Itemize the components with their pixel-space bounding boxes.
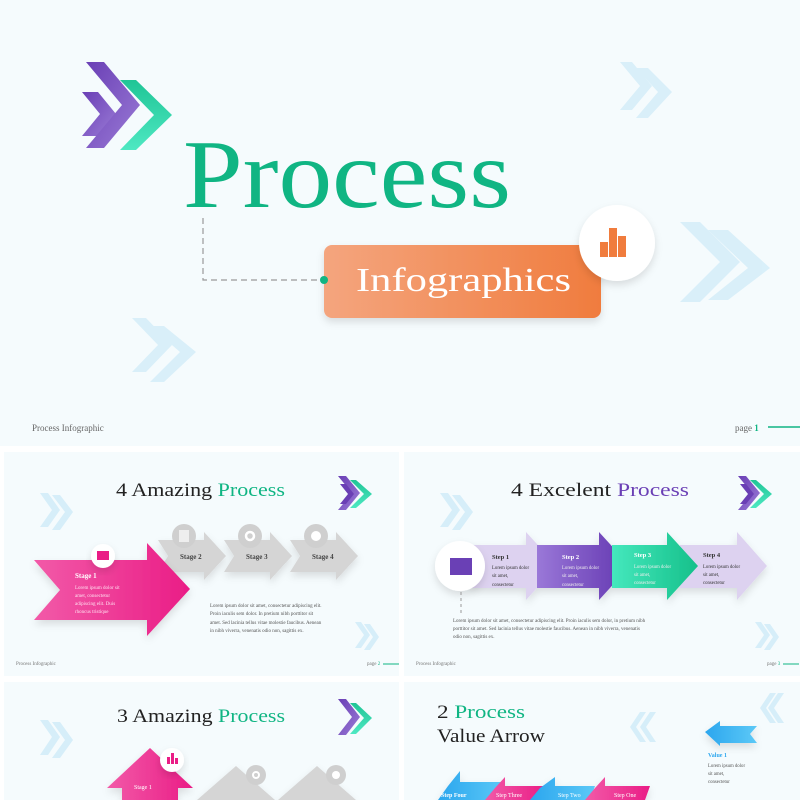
text: Lorem ipsum dolor	[634, 565, 671, 570]
text: sit amet,	[634, 573, 650, 578]
slide 4 icons	[160, 748, 346, 785]
pink stage 1 arrow: Stage 1	[75, 572, 97, 580]
stage labels: Stage 3	[246, 553, 268, 561]
slide 2 footer: page 2	[367, 662, 381, 667]
slide 2 title: 4 Amazing Process	[116, 480, 285, 501]
slide 2 footer: Process Infographic	[16, 662, 57, 667]
slide 5 title: Value Arrow	[437, 726, 545, 747]
footer slide 1: Process Infographic	[32, 423, 104, 433]
text: Lorem ipsum dolor	[703, 565, 740, 570]
slide 4 chevrons	[338, 699, 372, 735]
stage icons grey	[172, 524, 328, 548]
pink stage 1 arrow: amet, consectetur	[75, 594, 110, 599]
text: Step Four	[441, 793, 467, 799]
text: Lorem ipsum dolor	[708, 764, 745, 769]
===== slide 4 =====	[40, 720, 73, 758]
step texts: Step 1	[492, 554, 509, 561]
icon: bar chart circle	[579, 205, 655, 281]
slide 3 footer: Process Infographic	[416, 662, 457, 667]
slide 3 background	[404, 452, 800, 676]
subtitle box: Infographics	[356, 262, 571, 299]
slide 2 paragraph: amet. Sed lacinia tellus vitae molestie faucibus. Aenean	[210, 621, 322, 626]
slide 4 background	[4, 682, 399, 800]
text: Lorem ipsum dolor	[562, 566, 599, 571]
subtitle box	[324, 245, 601, 318]
text: Lorem ipsum dolor	[492, 566, 529, 571]
step texts: Step 3	[634, 552, 652, 559]
text: Step Three	[496, 793, 522, 799]
footer slide 1	[32, 423, 800, 433]
step texts	[492, 552, 721, 561]
text: Step One	[614, 793, 636, 799]
slide 3 paragraph: Lorem ipsum dolor sit amet, consectetur adipiscing elit. Proin iaculis sem dolor, in pretium nibh	[453, 619, 646, 624]
slide 3 footer	[416, 662, 799, 667]
slide 2 background	[4, 452, 399, 676]
text: sit amet,	[562, 574, 578, 579]
stage labels: Stage 2	[180, 553, 202, 561]
text: consectetur	[634, 581, 656, 586]
slide 2 paragraph: in nibh viverra, venenatis odio non, sagittis ex.	[210, 629, 304, 634]
slide 1 background	[0, 0, 800, 446]
===== slide 2 =====	[40, 493, 379, 650]
slide 2 footer	[16, 662, 399, 667]
pink stage 1 arrow: rhoncus tristique	[75, 610, 109, 615]
slide 5 background	[404, 682, 800, 800]
slide 3 paragraph: porttitor sit amet. Sed lacinia tellus vitae molestie faucibus. Aenean in nibh viverra, venenatis	[453, 627, 640, 632]
text: sit amet,	[492, 574, 508, 579]
text: consectetur	[703, 581, 725, 586]
pink stage 1 arrow: Lorem ipsum dolor sit	[75, 586, 120, 591]
icon: folder pink	[91, 544, 115, 568]
slide 2 paragraph: Lorem ipsum dolor sit amet, consectetur adipiscing elit.	[210, 604, 322, 609]
text: Stage 1	[134, 785, 152, 791]
slide 4 title: 3 Amazing Process	[117, 706, 285, 727]
slide 5 title	[437, 702, 545, 747]
pink stage 1 arrow: adipiscing elit. Duis	[75, 602, 115, 607]
step texts: Step 2	[562, 554, 579, 561]
slide 5 title: 2 Process	[437, 702, 525, 723]
footer slide 1: page 1	[735, 423, 759, 433]
===== slide 3 =====	[440, 493, 779, 650]
stage labels: Stage 4	[312, 553, 334, 561]
slide 3 paragraph: odio non, sagittis ex.	[453, 635, 495, 640]
pink stage 1 arrow	[34, 543, 190, 636]
text: consectetur	[708, 780, 730, 785]
connector dashed line	[203, 218, 328, 284]
slide 3 footer: page 3	[767, 662, 781, 667]
slide 3 chevrons	[738, 476, 772, 510]
title: Process	[183, 121, 511, 229]
value arrow	[705, 721, 757, 746]
text: Value 1	[708, 753, 727, 759]
===== slide 5 =====	[630, 693, 784, 742]
step arrows	[470, 532, 767, 600]
text: consectetur	[562, 583, 584, 588]
slide 2 paragraph: Proin iaculis sem dolor. In pretium nibh porttitor sit	[210, 612, 314, 617]
grey stage arrows	[158, 532, 358, 580]
text: Step Two	[558, 793, 581, 799]
icon: title chevrons	[82, 62, 172, 150]
slide 2 chevrons	[338, 476, 372, 510]
text: sit amet,	[708, 772, 724, 777]
text: sit amet,	[703, 573, 719, 578]
step texts: Step 4	[703, 552, 721, 559]
text: consectetur	[492, 583, 514, 588]
bottom step arrows	[438, 771, 650, 800]
slide 3 title: 4 Excelent Process	[511, 480, 689, 501]
up arrows	[107, 748, 356, 800]
icon: purple folder circle	[435, 541, 485, 591]
stage labels	[180, 553, 334, 561]
